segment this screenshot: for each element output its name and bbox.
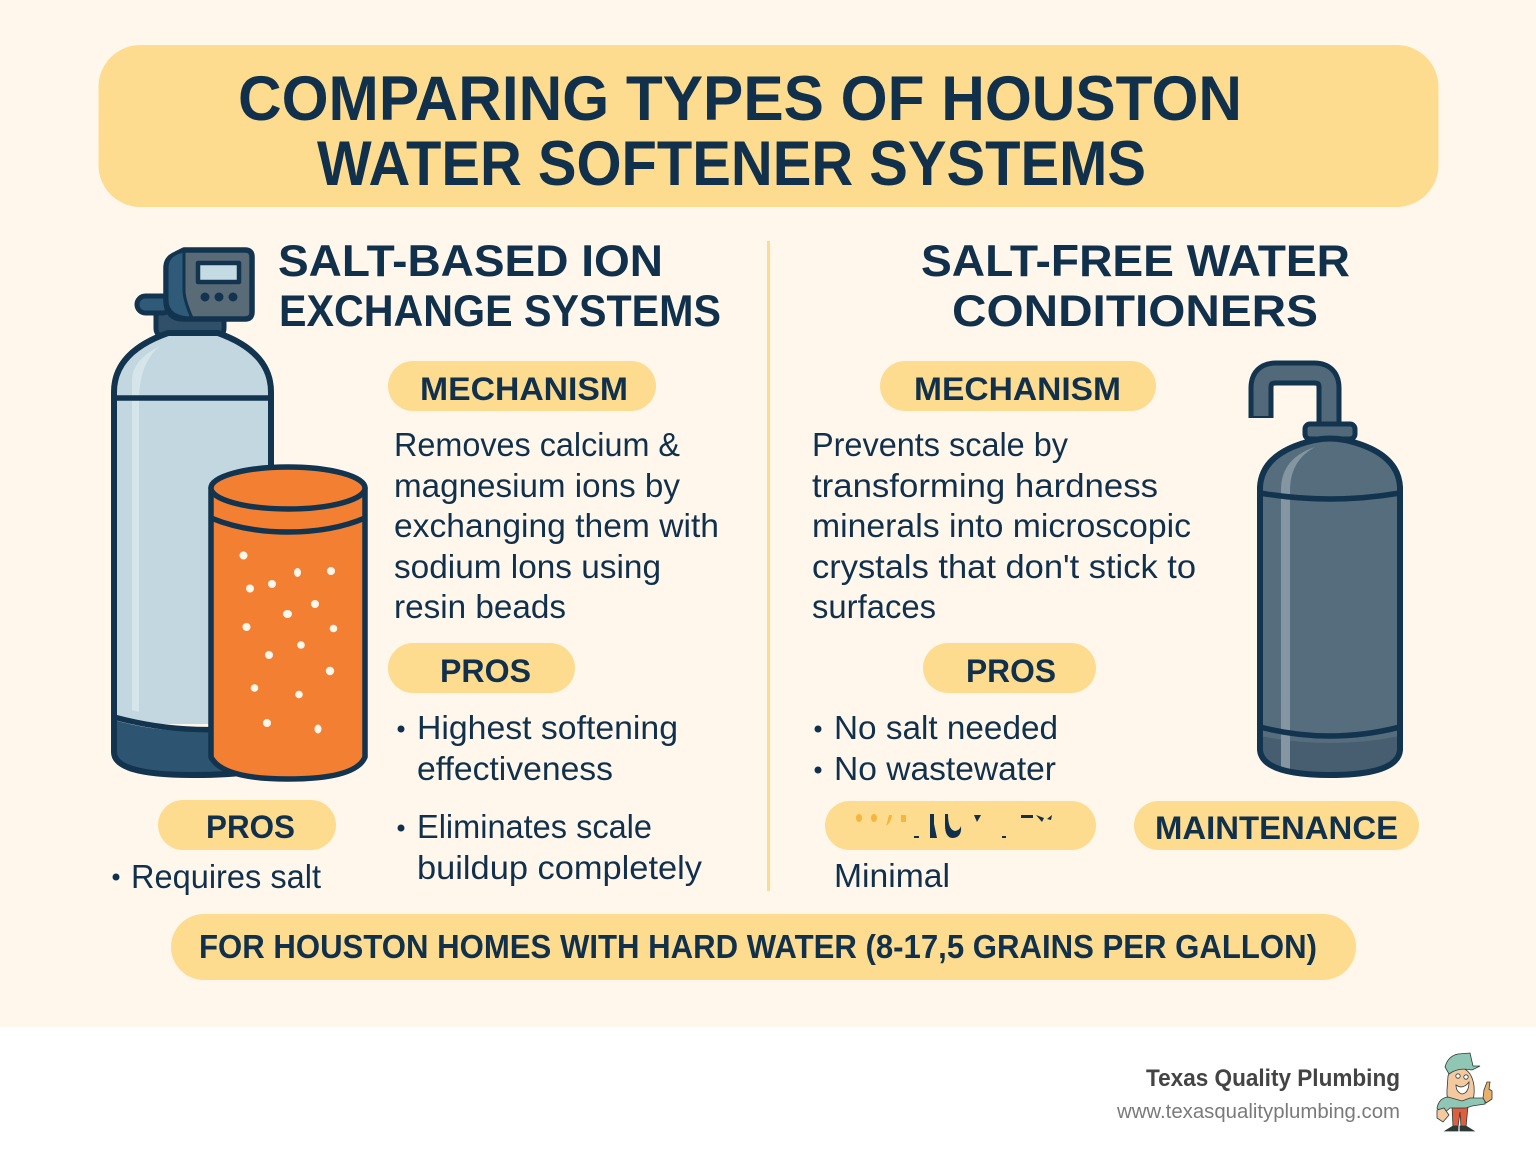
- label: pros: PROS: [966, 653, 1056, 689]
- list: salt-based pros: [398, 709, 703, 886]
- heading: salt-based ion exchange systems: EXCHANGE SYSTEMS: [279, 287, 721, 336]
- heading: salt-free water conditioners: SALT-FREE WATER: [921, 237, 1350, 286]
- text: salt-free mechanism: minerals into microscopic: [812, 507, 1191, 544]
- callout: houston hard water: FOR HOUSTON HOMES WITH HARD WATER (8-17,5 GRAINS PER GALLON): [199, 928, 1317, 965]
- list: salt-free pros: [814, 709, 1058, 787]
- panel: salt-based systems: [112, 237, 721, 895]
- heading: salt-free water conditioners: [921, 237, 1350, 336]
- label: lower pros: [158, 800, 336, 850]
- label: maintenance: [1134, 801, 1419, 850]
- list: salt-free pros: No wastewater: [834, 750, 1056, 787]
- title banner: WATER SOFTENER SYSTEMS: [317, 129, 1146, 199]
- text: salt-based mechanism: magnesium ions by: [394, 467, 680, 504]
- heading: salt-based ion exchange systems: SALT-BASED ION: [278, 237, 663, 286]
- heading: salt-based ion exchange systems: [278, 237, 721, 336]
- text: salt-based mechanism: resin beads: [394, 588, 566, 625]
- icon: plumber mascot: [1437, 1053, 1492, 1131]
- footer: company name and website: Texas Quality Plumbing: [1146, 1065, 1400, 1092]
- text: salt-free mechanism: crystals that don't stick to: [812, 548, 1196, 585]
- label: maintenance: MAINTENANCE: [1155, 810, 1398, 846]
- text: salt-based mechanism: exchanging them with: [394, 507, 719, 544]
- footer: company name and website: www.texasqualityplumbing.com: [1116, 1101, 1400, 1123]
- text: requires salt: Requires salt: [131, 858, 321, 895]
- text: salt-free mechanism: surfaces: [812, 588, 936, 625]
- heading: salt-free water conditioners: CONDITIONERS: [952, 287, 1318, 336]
- title banner: COMPARING TYPES OF HOUSTON: [238, 64, 1242, 134]
- label: mechanism: [880, 361, 1156, 411]
- icon: softener tank with control head: [114, 250, 271, 775]
- title banner: [98, 45, 1438, 207]
- text: minimal: Minimal: [834, 857, 950, 894]
- text: salt-based mechanism: sodium lons using: [394, 548, 661, 585]
- footer: company name and website: [1116, 1065, 1400, 1123]
- icon: resin cylinder: [211, 467, 365, 779]
- text: salt-free mechanism: Prevents scale by: [812, 426, 1068, 463]
- label: mechanism: MECHANISM: [914, 371, 1121, 407]
- callout: houston hard water: [171, 914, 1356, 980]
- text: salt-based mechanism: [394, 426, 719, 625]
- icon: salt-free tank: [1260, 373, 1400, 775]
- text: salt-based mechanism: Removes calcium &: [394, 426, 680, 463]
- panel: salt-free conditioners: [812, 237, 1419, 894]
- list: salt-based pros: buildup completely: [417, 849, 703, 886]
- label: lower pros: PROS: [206, 809, 295, 845]
- label: pros: [923, 643, 1096, 693]
- label: mechanism: MECHANISM: [420, 371, 628, 407]
- label: pros: PROS: [440, 653, 531, 689]
- label: mechanism: [388, 361, 656, 411]
- label: pros: [388, 643, 575, 693]
- label: garbled pill: [825, 801, 1096, 850]
- list: salt-based pros: effectiveness: [417, 750, 613, 787]
- resin beads: [240, 552, 337, 734]
- text: salt-free mechanism: transforming hardness: [812, 467, 1158, 504]
- list: salt-based pros: Eliminates scale: [417, 808, 652, 845]
- text: salt-free mechanism: [812, 426, 1196, 625]
- list: salt-based pros: Highest softening: [417, 709, 678, 746]
- list: salt-free pros: No salt needed: [834, 709, 1058, 746]
